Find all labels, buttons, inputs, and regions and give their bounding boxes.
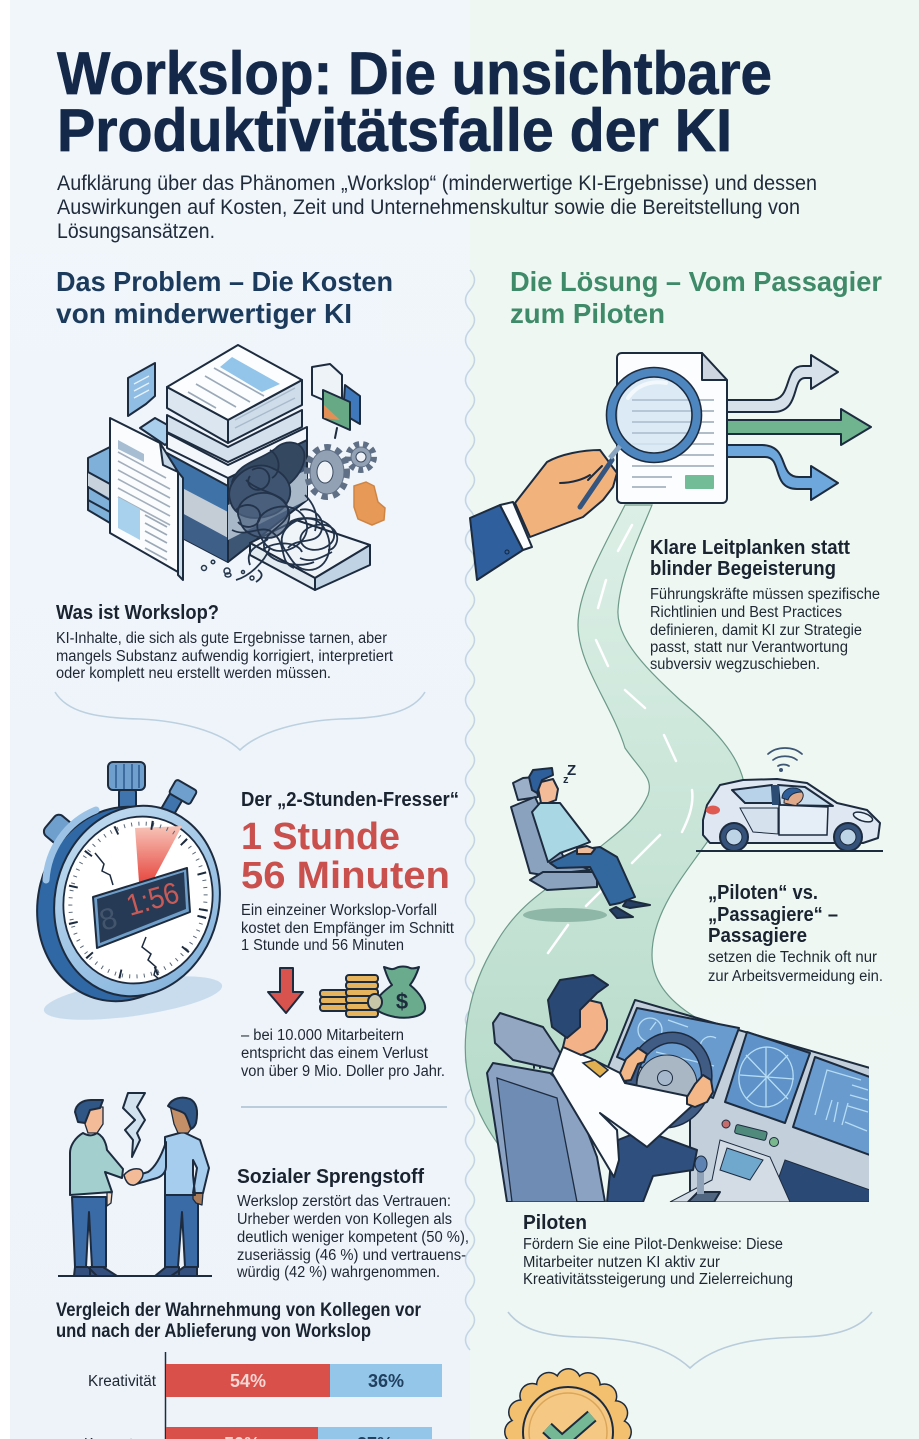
text block: piloten vs passagiere: Passagiere — [708, 925, 807, 947]
text block: leitplanken — [650, 537, 880, 673]
subtitle: Lösungsansätzen. — [57, 219, 215, 243]
heading: solution — [510, 266, 882, 329]
heading: solution: zum Piloten — [510, 298, 665, 329]
cockpit dashboard — [608, 1000, 870, 1202]
icon: coins and money bag — [320, 966, 425, 1018]
text block: piloten vs passagiere — [708, 882, 883, 985]
bar chart: before and after: Kreativität — [88, 1373, 157, 1390]
pilot neck and face — [563, 1000, 607, 1055]
pilot torso and arm — [552, 1047, 693, 1177]
text block: piloten vs passagiere: „Passagiere“ – — [708, 904, 838, 926]
bar chart: before and after — [84, 1352, 442, 1439]
subtitle — [57, 171, 817, 243]
icon: self-driving car with wifi — [696, 748, 883, 851]
text block: leitplanken: blinder Begeisterung — [650, 558, 836, 580]
subtitle: Auswirkungen auf Kosten, Zeit und Unternehmenskultur sowie die Bereitstellung von — [57, 195, 800, 219]
icon: sleeping passenger in seat: Z — [567, 762, 576, 779]
pilot hands — [620, 1048, 713, 1107]
text block: piloten: Piloten — [523, 1212, 587, 1234]
icon: red down arrow — [268, 968, 303, 1013]
text block: sozialer sprengstoff — [236, 1166, 469, 1281]
text block: 2-Stunden-Fresser: 1 Stunde — [241, 816, 400, 858]
text block: was ist workslop: KI-Inhalte, die sich als gute Ergebnisse tarnen, aber — [56, 630, 387, 647]
pilot hair — [548, 975, 608, 1038]
text block: sozialer sprengstoff: deutlich weniger kompetent (50 %), — [237, 1229, 469, 1246]
heading: problem: Das Problem – Die Kosten — [56, 266, 393, 297]
text block: 2-Stunden-Fresser: Ein einzeiner Workslop-Vorfall — [241, 902, 437, 919]
brace: left section — [55, 692, 425, 750]
text block: 2-Stunden-Fresser: kostet den Empfänger im Schnitt — [241, 920, 455, 937]
icon: magnifier over document with three arrows — [470, 353, 871, 580]
icon: stopwatch with 1:56 display: 1:56 — [123, 876, 183, 923]
text block: piloten — [523, 1212, 793, 1288]
chart title: und nach der Ablieferung von Workslop — [56, 1321, 371, 1342]
icon: coins and money bag: $ — [396, 989, 408, 1014]
text block: leitplanken: Führungskräfte müssen spezifische — [650, 586, 880, 603]
icon: sleeping passenger in seat: z — [563, 774, 569, 786]
icon: pilot at cockpit controls — [487, 975, 870, 1202]
text block: leitplanken: Klare Leitplanken statt — [650, 537, 850, 559]
text block: was ist workslop: mangels Substanz aufwendig korrigiert, interpretiert — [56, 648, 394, 665]
chart title — [56, 1300, 422, 1342]
heading: problem: von minderwertiger KI — [56, 298, 352, 329]
title: Produktivitätsfalle der KI — [57, 97, 732, 164]
text block: was ist workslop: Was ist Workslop? — [56, 602, 219, 624]
heading: solution: Die Lösung – Vom Passagier — [510, 266, 882, 297]
divider: wavy centre line — [466, 270, 474, 1350]
text block: 2-Stunden-Fresser: 56 Minuten — [241, 855, 450, 897]
text block: piloten vs passagiere: setzen die Technik oft nur — [708, 949, 877, 966]
icon: sleeping passenger in seat — [511, 762, 650, 922]
road — [465, 505, 745, 1160]
text block: 2-Stunden-Fresser: 1 Stunde und 56 Minuten — [241, 937, 404, 954]
brace: right section — [508, 1312, 872, 1368]
text block: loss per year: – bei 10.000 Mitarbeitern — [241, 1027, 404, 1044]
text block: loss per year: entspricht das einem Verlust — [241, 1045, 429, 1062]
text block: piloten vs passagiere: zur Arbeitsvermeidung ein. — [708, 968, 883, 985]
text block: loss per year: von über 9 Mio. Doller pro Jahr. — [241, 1063, 445, 1080]
text block: loss per year — [241, 1027, 445, 1080]
text block: leitplanken: subversiv wegzuschieben. — [650, 656, 820, 673]
text block: sozialer sprengstoff: würdig (42 %) wahrgenommen. — [236, 1264, 440, 1281]
text block: leitplanken: definieren, damit KI zur Strategie — [650, 622, 862, 639]
text block: leitplanken: Richtlinien und Best Practices — [650, 604, 842, 621]
text block: piloten: Fördern Sie eine Pilot-Denkweise: Diese — [523, 1236, 783, 1253]
bar chart: before and after: 54% — [230, 1371, 266, 1391]
bar chart: before and after: 36% — [368, 1371, 404, 1391]
text block: was ist workslop: oder komplett neu erstellt werden müssen. — [56, 665, 331, 682]
text block: piloten vs passagiere: „Piloten“ vs. — [708, 882, 818, 904]
pilot legs — [607, 1130, 697, 1202]
text block: sozialer sprengstoff: Urheber werden von Kollegen als — [237, 1211, 452, 1228]
chart title: Vergleich der Wahrnehmung von Kollegen vor — [56, 1300, 422, 1321]
icon: stopwatch with 1:56 display: 8 — [96, 901, 121, 938]
icon: gold medal with check mark — [516, 1380, 620, 1439]
icon: stopwatch with 1:56 display — [17, 762, 240, 1028]
text block: piloten: Mitarbeiter nutzen KI aktiv zur — [523, 1254, 720, 1271]
heading: problem — [56, 266, 393, 329]
text block: 2-Stunden-Fresser — [241, 789, 459, 954]
title — [57, 40, 772, 164]
subtitle: Aufklärung über das Phänomen „Workslop“ (minderwertige KI-Ergebnisse) und dessen — [57, 171, 817, 195]
icon: two people shaking hands with lightning — [58, 1093, 212, 1276]
icon: document stack with tangled scribble — [88, 345, 385, 590]
text block: sozialer sprengstoff: zuseriässig (46 %) und vertrauens- — [237, 1247, 466, 1264]
pilot epaulette — [583, 1060, 608, 1077]
text block: was ist workslop — [56, 602, 394, 682]
text block: piloten: Kreativitätssteigerung und Zielerreichung — [523, 1271, 793, 1288]
text block: leitplanken: passt, statt nur Verantwortung — [650, 639, 848, 656]
text block: sozialer sprengstoff: Sozialer Sprengstoff — [237, 1166, 424, 1188]
pilot seat — [487, 1013, 605, 1202]
title: Workslop: Die unsichtbare — [57, 40, 772, 107]
steering wheel — [626, 1032, 713, 1128]
text block: sozialer sprengstoff: Werkslop zerstört das Vertrauen: — [237, 1193, 451, 1210]
text block: 2-Stunden-Fresser: Der „2-Stunden-Fresser“ — [241, 789, 459, 811]
